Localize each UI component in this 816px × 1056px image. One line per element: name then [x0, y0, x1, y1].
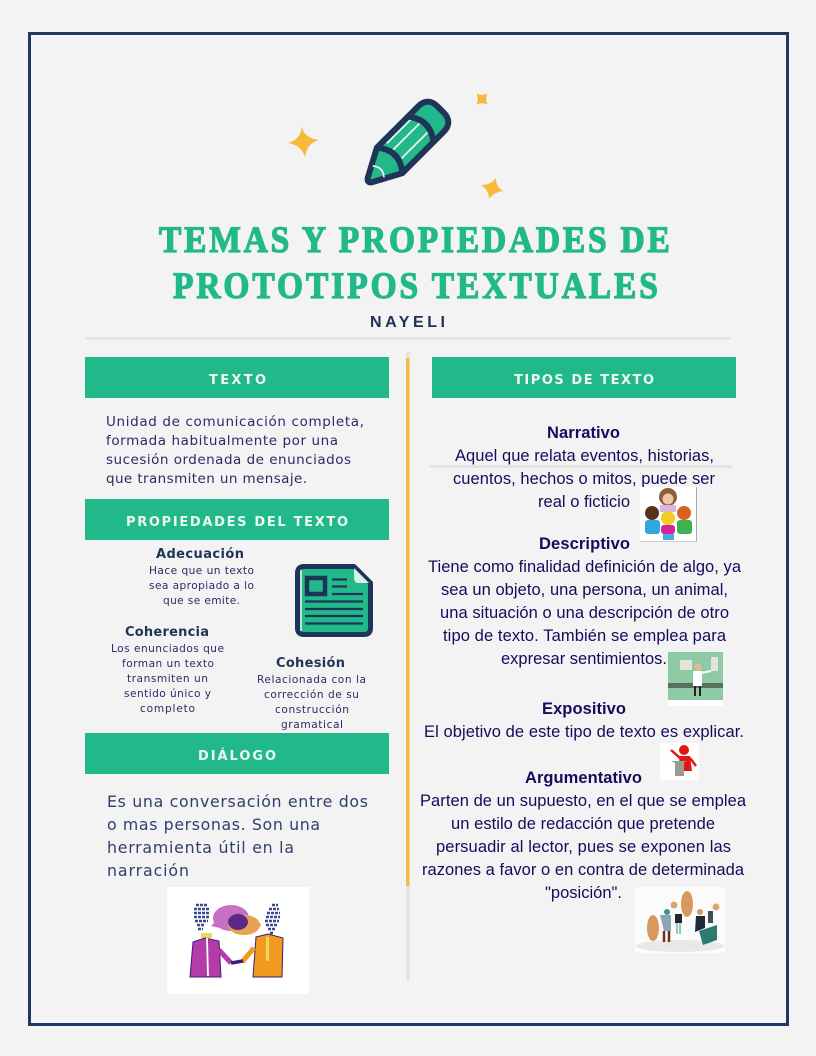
text block: expositivo: [424, 700, 744, 741]
text block: argumentativo: razones a favor o en contra de determinada: [422, 861, 745, 879]
coherencia: sentido único y: [124, 688, 211, 700]
text block: descriptivo: tipo de texto. También se emplea para: [443, 627, 727, 645]
text block: narrativo: [453, 424, 716, 511]
text block: descriptivo: sea un objeto, una persona, un animal,: [441, 581, 728, 599]
coherencia: forman un texto: [122, 658, 214, 670]
illustration: red speaker: [660, 743, 699, 780]
coherencia: transmiten un: [127, 673, 208, 685]
panel: texto: [85, 357, 389, 487]
icon: document: [298, 566, 370, 634]
coherencia: [111, 625, 224, 715]
panel: dialogo: Es una conversación entre dos: [107, 792, 368, 811]
panel: dialogo: o mas personas. Son una: [107, 815, 320, 834]
cohesion: Relacionada con la: [257, 674, 366, 686]
text block: narrativo: real o ficticio: [538, 493, 630, 511]
text block: argumentativo: un estilo de redacción que pretende: [451, 815, 715, 833]
text block: descriptivo: [428, 535, 742, 668]
coherencia: completo: [140, 703, 195, 715]
adecuacion: [149, 547, 254, 607]
text block: argumentativo: "posición".: [545, 884, 622, 902]
text block: argumentativo: Argumentativo: [525, 769, 642, 787]
title: [159, 218, 670, 306]
text block: descriptivo: Descriptivo: [539, 535, 630, 553]
illustration: handshake dialogue: [167, 887, 309, 994]
panel: propiedades del texto: [85, 499, 389, 731]
illustration: scientist: [668, 652, 723, 706]
text block: argumentativo: Parten de un supuesto, en el que se emplea: [420, 792, 747, 810]
icon: pencil: [356, 97, 453, 194]
panel: tipos de texto: [432, 357, 736, 398]
cohesion: gramatical: [281, 719, 343, 731]
text block: argumentativo: [420, 769, 747, 902]
text block: narrativo: Narrativo: [547, 424, 620, 442]
panel: texto: TEXTO: [209, 373, 266, 388]
text block: expositivo: Expositivo: [542, 700, 626, 718]
icon: small sparkle: [476, 94, 488, 104]
panel: dialogo: herramienta útil en la: [107, 838, 294, 857]
adecuacion: Adecuación: [156, 547, 244, 562]
adecuacion: sea apropiado a lo: [149, 580, 254, 592]
icon: large sparkle: [288, 127, 319, 157]
title: PROTOTIPOS TEXTUALES: [173, 264, 658, 306]
text block: descriptivo: Tiene como finalidad definición de algo, ya: [428, 558, 742, 576]
icon: medium sparkle: [481, 178, 503, 199]
panel: propiedades del texto: PROPIEDADES DEL TEXTO: [126, 515, 348, 530]
coherencia: Los enunciados que: [111, 643, 224, 655]
adecuacion: Hace que un texto: [149, 565, 254, 577]
text block: descriptivo: expresar sentimientos.: [501, 650, 667, 668]
yellow column divider: [406, 358, 410, 886]
cohesion: Cohesión: [276, 656, 345, 671]
author: NAYELI: [370, 314, 445, 331]
panel: tipos de texto: TIPOS DE TEXTO: [514, 373, 654, 388]
cohesion: construcción: [275, 704, 349, 716]
panel: texto: formada habitualmente por una: [106, 433, 338, 449]
text block: expositivo: El objetivo de este tipo de texto es explicar.: [424, 723, 744, 741]
illustration: children: [640, 487, 697, 542]
text block: narrativo: cuentos, hechos o mitos, puede ser: [453, 470, 716, 488]
panel: texto: Unidad de comunicación completa,: [106, 414, 364, 430]
illustration: people with light bulbs: [635, 887, 725, 953]
text block: descriptivo: una situación o una descripción de otro: [440, 604, 729, 622]
panel: dialogo: DIÁLOGO: [198, 748, 276, 764]
panel: dialogo: narración: [107, 861, 189, 880]
panel: texto: sucesión ordenada de enunciados: [106, 452, 351, 468]
panel: dialogo: [85, 733, 389, 880]
text block: argumentativo: persuadir al lector, pues se exponen las: [436, 838, 731, 856]
adecuacion: que se emite.: [163, 595, 240, 607]
title: TEMAS Y PROPIEDADES DE: [159, 218, 670, 260]
cohesion: corrección de su: [264, 689, 359, 701]
panel: texto: que transmiten un mensaje.: [106, 471, 307, 487]
text block: narrativo: Aquel que relata eventos, historias,: [455, 447, 714, 465]
coherencia: Coherencia: [125, 625, 209, 640]
cohesion: [257, 656, 366, 731]
